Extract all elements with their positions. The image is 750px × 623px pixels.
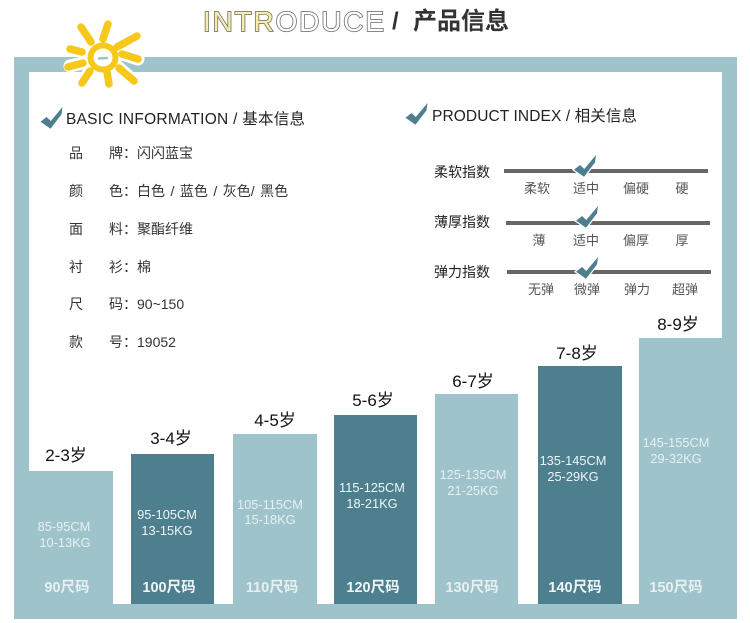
thickness scale: 适中 [573,233,599,248]
softness scale: 适中 [573,181,599,196]
bar: 130: 6-7岁 [452,372,494,391]
thickness scale: 厚 [675,233,689,248]
white inner panel [29,72,722,604]
bar: 150: 150尺码 [649,579,703,596]
bar: 150: 8-9岁 [657,315,699,334]
bar: 120 [334,391,417,604]
panel: product index [406,103,711,297]
softness scale: 柔软指数 [434,164,490,180]
bar: 110: 15-18KG [244,512,296,527]
elasticity scale: 弹力指数 [434,264,490,280]
thickness scale [434,206,710,248]
row: shirt: 衬 [69,259,83,275]
row: fabric [69,221,193,237]
softness scale: 偏硬 [623,181,649,196]
bar: 110: 110尺码 [246,579,298,596]
bar: 130 [435,372,518,604]
elasticity scale: 无弹 [528,282,554,297]
bar: 120: 18-21KG [346,496,398,511]
bar: 130: 130尺码 [445,579,499,596]
bar: 140: 7-8岁 [556,344,598,363]
bar: 110: 4-5岁 [254,411,296,430]
bar: 110: 105-115CM [237,497,303,512]
bar: 110 [233,411,317,604]
bar: 90: 2-3岁 [45,446,87,465]
bar: 90: 90尺码 [44,579,90,596]
elasticity scale: 超弹 [672,282,698,297]
panel: basic information [40,107,305,350]
bar: 100: 95-105CM [137,507,197,522]
bar: 140 [538,344,622,604]
softness scale: 硬 [675,181,689,196]
bar: 100: 100尺码 [142,579,196,596]
bar: 100 [131,429,214,604]
softness scale [434,155,708,196]
heading: product index: PRODUCT INDEX / 相关信息 [432,107,637,125]
row: style number: 款 [69,334,83,350]
row: size [69,296,184,312]
elasticity scale: 微弹 [574,282,600,297]
thickness scale: 偏厚 [623,233,649,248]
bar: 100: 13-15KG [141,523,193,538]
elasticity scale: 弹力 [624,282,650,297]
row: size: 码：90~150 [109,296,184,312]
bar: 120: 5-6岁 [352,391,394,410]
row: brand: 牌：闪闪蓝宝 [109,145,193,161]
bar: 150 [639,315,723,604]
bar: 140: 135-145CM [540,453,606,468]
bar: 130: 125-135CM [440,467,506,482]
row: fabric: 料：聚酯纤维 [109,221,193,237]
elasticity scale [434,257,711,297]
row: style number: 号：19052 [109,334,176,350]
bar: 90: 10-13KG [39,535,91,550]
bar: 150: 29-32KG [650,451,702,466]
row: colour: 色：白色 / 蓝色 / 灰色/ 黑色 [109,183,288,199]
row: fabric: 面 [69,221,83,237]
size chart [29,315,723,604]
heading: basic information: BASIC INFORMATION / 基本信息 [66,110,305,128]
row: brand [69,145,193,161]
thickness scale: 薄厚指数 [434,214,490,230]
row: style number [69,334,176,350]
bar: 140: 140尺码 [548,579,602,596]
row: shirt: 衫：棉 [109,259,151,275]
bar: 100: 3-4岁 [150,429,192,448]
icon: check [40,107,62,129]
thickness scale: 薄 [532,233,546,248]
row: shirt [69,259,151,275]
bar: 90 [29,446,113,604]
title chinese: 产品信息 [413,8,509,35]
bar: 120: 120尺码 [346,579,400,596]
icon: sun [68,24,138,84]
title [203,6,509,37]
bar: 130: 21-25KG [447,483,499,498]
row: size: 尺 [69,296,83,312]
bar: 140: 25-29KG [547,469,599,484]
bar: 120: 115-125CM [339,480,405,495]
icon: check [406,103,428,125]
row: colour: 颜 [69,183,83,199]
row: brand: 品 [69,145,83,161]
bar: 90: 85-95CM [38,519,90,534]
title outlined word: INTRODUCE [203,6,384,37]
bar: 150: 145-155CM [643,435,709,450]
title slash: / [392,8,399,35]
softness scale: 柔软 [524,181,550,196]
